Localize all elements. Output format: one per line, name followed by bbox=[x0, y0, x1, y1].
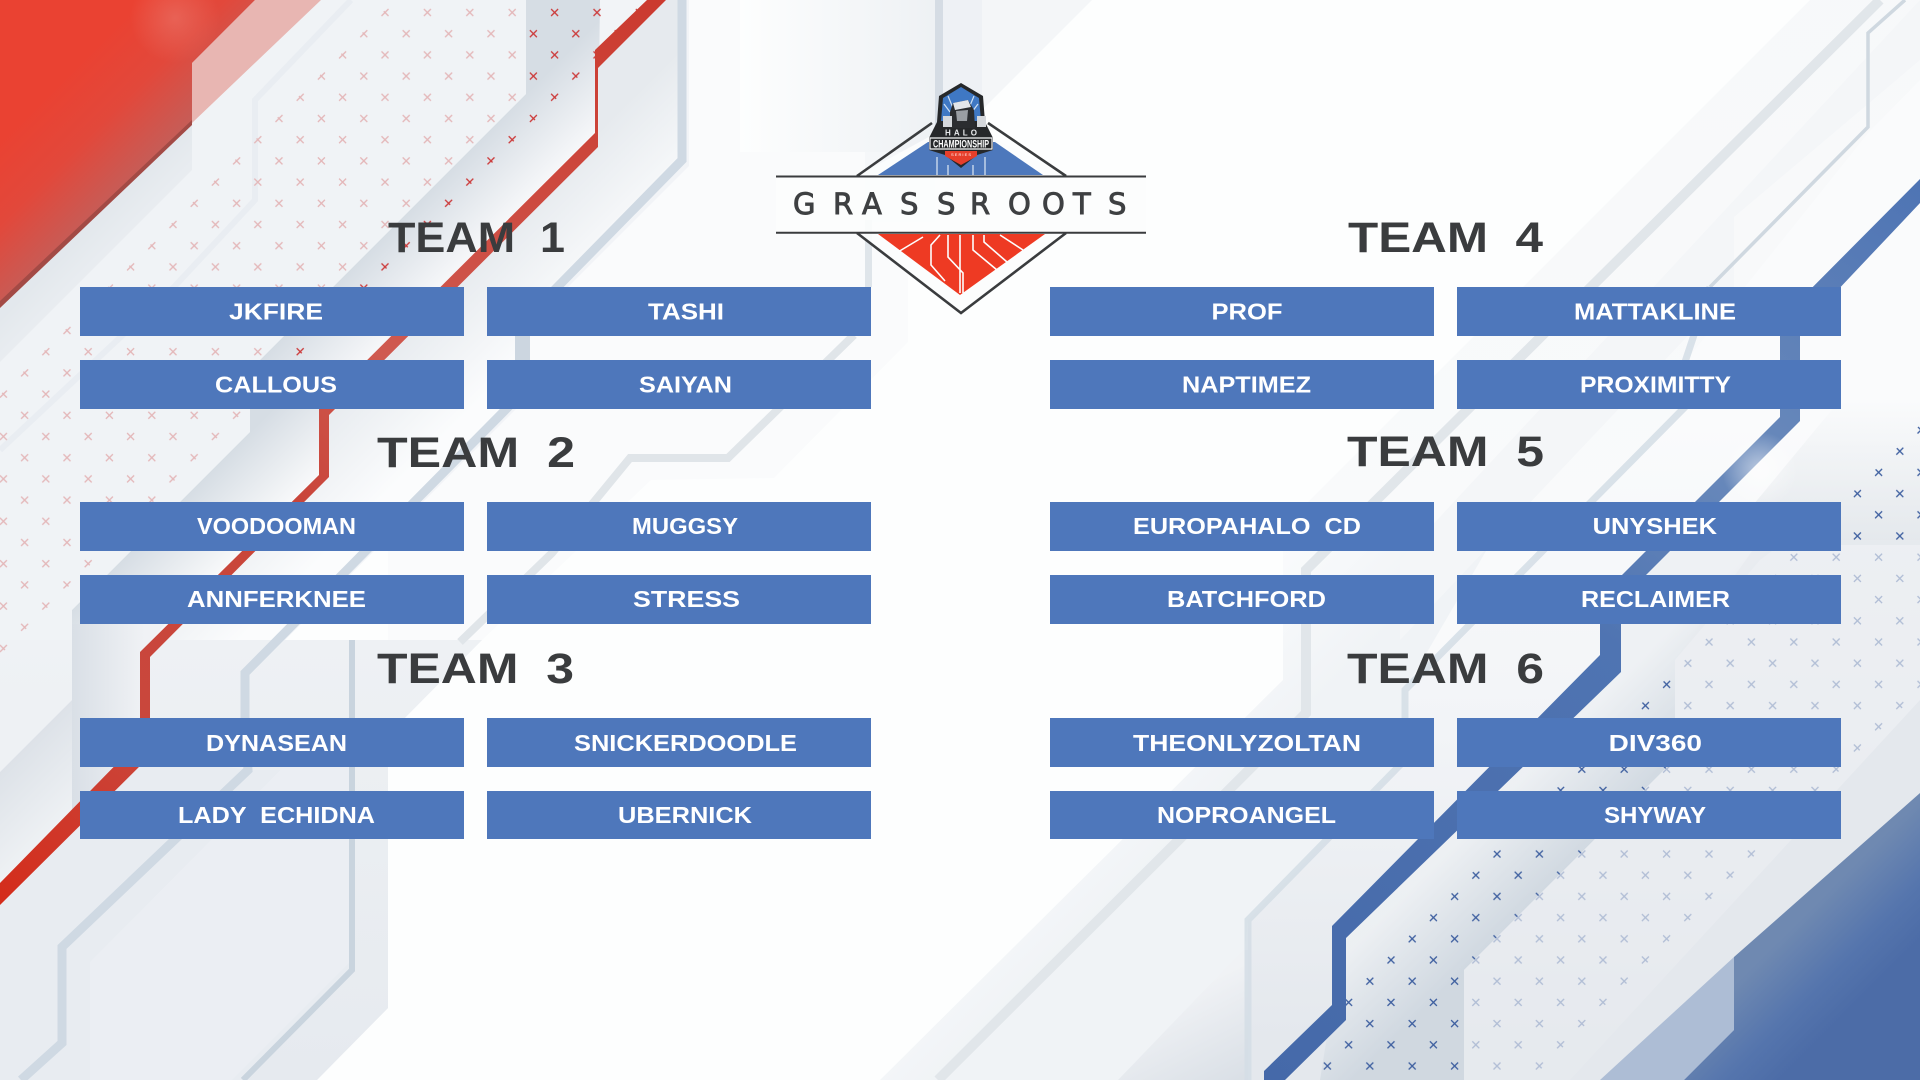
player: DYNASEAN bbox=[80, 718, 464, 767]
heading: team 4: TEAM 4 bbox=[1348, 214, 1543, 262]
heading: team 1: TEAM 1 bbox=[388, 214, 565, 262]
player: ANNFERKNEE: ANNFERKNEE bbox=[187, 586, 366, 612]
logo: shield badge: CHAMPIONSHIP bbox=[933, 138, 989, 150]
player: MATTAKLINE: MATTAKLINE bbox=[1574, 298, 1736, 324]
player: SAIYAN bbox=[487, 360, 871, 409]
heading: team 3: TEAM 3 bbox=[377, 645, 574, 693]
pattern: red x marks bbox=[0, 0, 655, 655]
panel overlay: pale hexagon right bbox=[1464, 540, 1920, 1080]
player: EUROPAHALO CD: EUROPAHALO CD bbox=[1133, 513, 1361, 539]
panel: team 3 bbox=[80, 645, 871, 839]
player: UNYSHEK: UNYSHEK bbox=[1593, 513, 1717, 539]
player: LADY ECHIDNA: LADY ECHIDNA bbox=[178, 802, 375, 828]
player: NAPTIMEZ bbox=[1050, 360, 1434, 409]
player: SNICKERDOODLE: SNICKERDOODLE bbox=[574, 730, 797, 756]
player: STRESS: STRESS bbox=[633, 586, 740, 612]
player: UBERNICK: UBERNICK bbox=[618, 802, 752, 828]
player: THEONLYZOLTAN: THEONLYZOLTAN bbox=[1133, 730, 1361, 756]
panel: team 1 bbox=[80, 214, 871, 409]
heading: team 2: TEAM 2 bbox=[377, 429, 575, 477]
logo: diamond outline bbox=[857, 123, 1066, 313]
player: STRESS bbox=[487, 575, 871, 624]
logo: red lower field with circuit lines bbox=[878, 234, 1045, 295]
circuit stripe: red bbox=[0, 0, 666, 905]
player: VOODOOMAN: VOODOOMAN bbox=[197, 513, 356, 539]
circuit stripe: blue bbox=[1264, 179, 1920, 1080]
player: PROF: PROF bbox=[1212, 298, 1282, 324]
player: UBERNICK bbox=[487, 791, 871, 839]
player: BATCHFORD bbox=[1050, 575, 1434, 624]
pattern: blue x marks bbox=[1265, 425, 1920, 1080]
player: SHYWAY bbox=[1457, 791, 1841, 839]
player: BATCHFORD: BATCHFORD bbox=[1167, 586, 1326, 612]
player: DYNASEAN: DYNASEAN bbox=[206, 730, 347, 756]
logo: shield badge bbox=[929, 83, 993, 168]
player: PROF bbox=[1050, 287, 1434, 336]
player: PROXIMITTY bbox=[1457, 360, 1841, 409]
player: THEONLYZOLTAN bbox=[1050, 718, 1434, 767]
player: NOPROANGEL: NOPROANGEL bbox=[1157, 802, 1336, 828]
player: LADY ECHIDNA bbox=[80, 791, 464, 839]
player: NOPROANGEL bbox=[1050, 791, 1434, 839]
highlight on blue stripe bbox=[1720, 430, 1800, 510]
player: CALLOUS: CALLOUS bbox=[215, 372, 337, 398]
logo: shield badge: HALO bbox=[945, 128, 977, 138]
player: JKFIRE: JKFIRE bbox=[229, 298, 323, 324]
player: MATTAKLINE bbox=[1457, 287, 1841, 336]
heading: team 6: TEAM 6 bbox=[1347, 645, 1544, 693]
panel: team 5 bbox=[1050, 428, 1841, 624]
player: RECLAIMER: RECLAIMER bbox=[1581, 586, 1730, 612]
player: MUGGSY bbox=[487, 502, 871, 551]
logo: Grassroots wordmark: GRASSROOTS bbox=[793, 187, 1126, 221]
player: RECLAIMER bbox=[1457, 575, 1841, 624]
player: UNYSHEK bbox=[1457, 502, 1841, 551]
player: DIV360: DIV360 bbox=[1609, 730, 1702, 756]
player: CALLOUS bbox=[80, 360, 464, 409]
player: PROXIMITTY: PROXIMITTY bbox=[1580, 372, 1731, 398]
player: TASHI bbox=[487, 287, 871, 336]
player: SHYWAY: SHYWAY bbox=[1604, 802, 1706, 828]
panel: team 2 bbox=[80, 429, 871, 624]
corner: blue triangle bottom right bbox=[1600, 793, 1920, 1080]
panel: team 4 bbox=[1050, 214, 1841, 409]
player: TASHI: TASHI bbox=[648, 298, 724, 324]
panel: team 6 bbox=[1050, 645, 1841, 839]
player: DIV360 bbox=[1457, 718, 1841, 767]
logo: Grassroots emblem bbox=[776, 83, 1146, 313]
player: EUROPAHALO CD bbox=[1050, 502, 1434, 551]
logo: blue upper field bbox=[878, 142, 1043, 175]
player: JKFIRE bbox=[80, 287, 464, 336]
panel overlay: pale hexagon left bbox=[0, 0, 526, 772]
corner: red triangle top left bbox=[0, 0, 321, 308]
player: VOODOOMAN bbox=[80, 502, 464, 551]
player: SNICKERDOODLE bbox=[487, 718, 871, 767]
logo: shield badge: SERIES bbox=[951, 152, 971, 157]
player: MUGGSY: MUGGSY bbox=[632, 513, 738, 539]
logo: rules bbox=[776, 176, 1146, 233]
player: SAIYAN: SAIYAN bbox=[639, 372, 732, 398]
player: ANNFERKNEE bbox=[80, 575, 464, 624]
player: NAPTIMEZ: NAPTIMEZ bbox=[1182, 372, 1311, 398]
heading: team 5: TEAM 5 bbox=[1347, 428, 1544, 476]
